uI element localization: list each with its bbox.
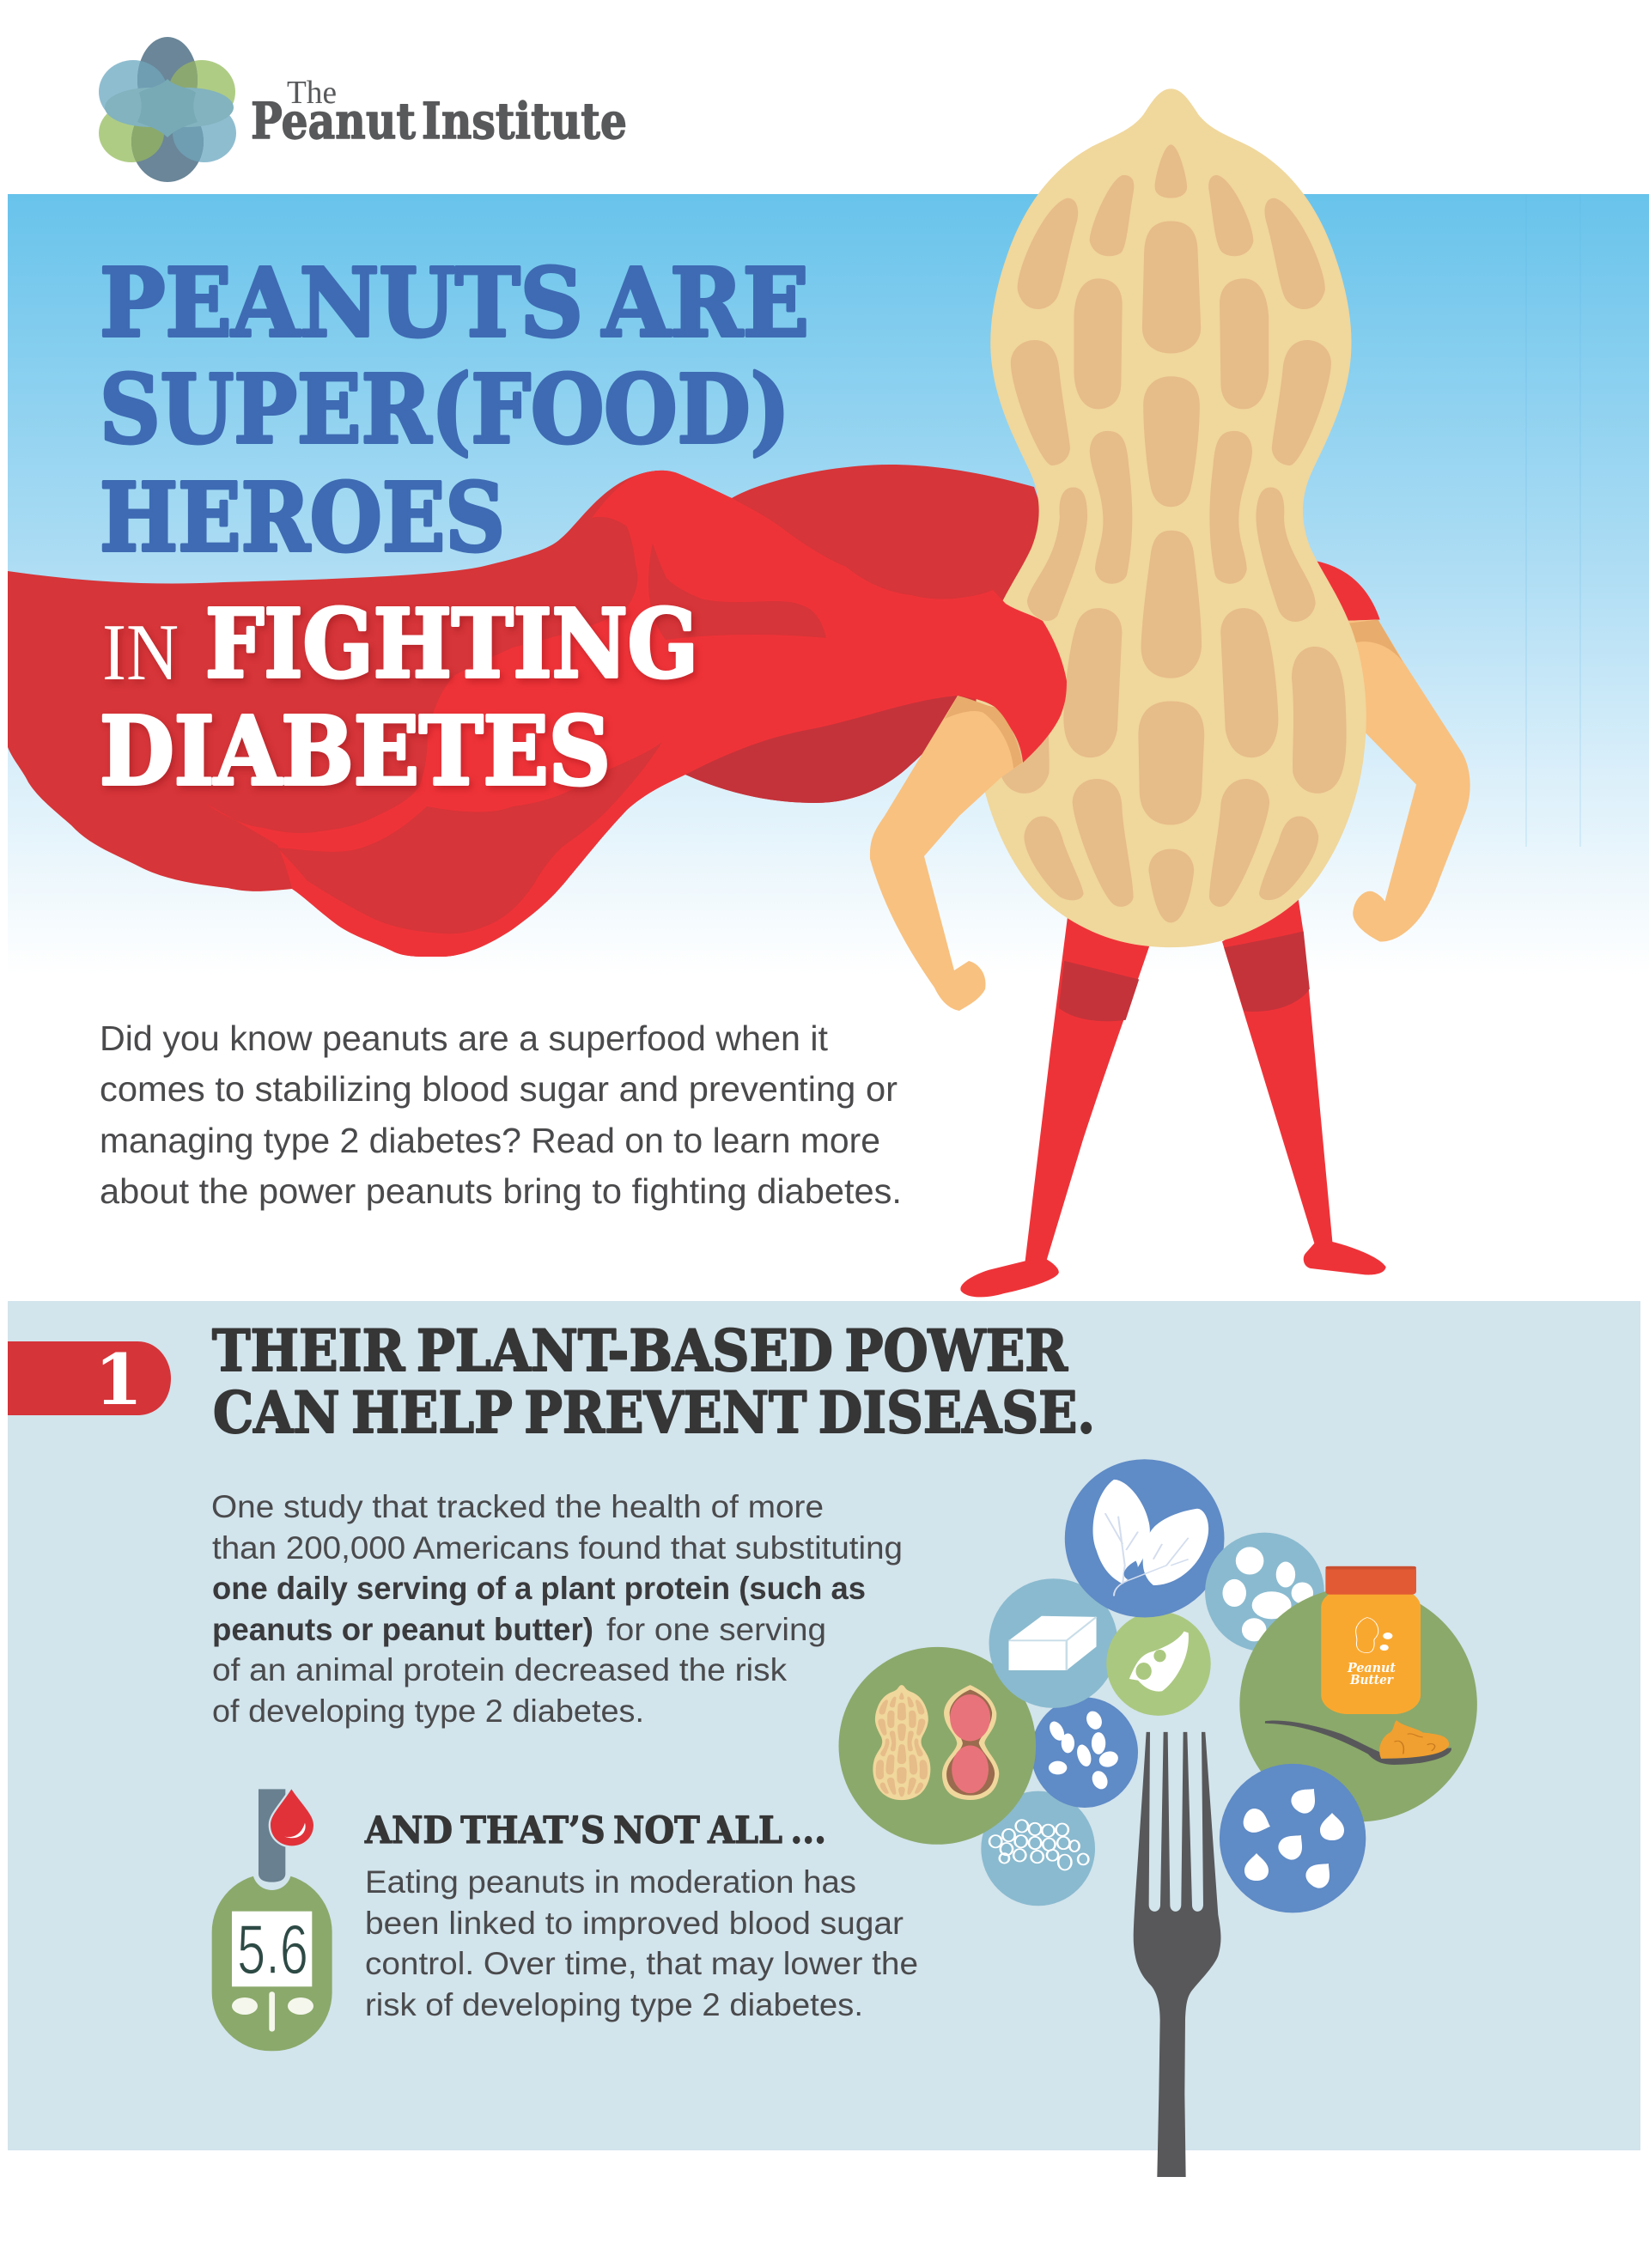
study paragraph: of an animal protein decreased the risk <box>212 1652 788 1687</box>
study paragraph: One study that tracked the health of more <box>211 1489 824 1524</box>
subheading paragraph: risk of developing type 2 diabetes. <box>365 1987 863 2022</box>
right leg <box>1222 897 1386 1274</box>
subheading paragraph: control. Over time, that may lower the <box>365 1946 918 1981</box>
circle: leafy greens <box>1065 1459 1225 1618</box>
icon: open peanut <box>942 1685 999 1800</box>
section heading: THEIR PLANT-BASED POWER <box>212 1317 1068 1384</box>
subheading paragraph: been linked to improved blood sugar <box>365 1906 904 1941</box>
cape: upper dark fold <box>648 544 826 640</box>
logo wordmark: Peanut Institute <box>251 92 627 150</box>
right arm shadow band <box>1345 619 1403 662</box>
logo: The Peanut Institute <box>99 37 627 182</box>
jar label <box>1347 1660 1396 1687</box>
plant protein food circles <box>839 1459 1477 1912</box>
icon: glucose meter: 5.6 <box>237 1911 308 1989</box>
peanut shell <box>976 88 1366 947</box>
word: FIGHTING: FIGHTING <box>205 588 698 699</box>
circle: tofu <box>989 1578 1118 1708</box>
logo wordmark <box>251 75 627 150</box>
icon: peanut butter dollop <box>1379 1720 1449 1759</box>
section number tab: 1 <box>94 1340 143 1421</box>
left leg <box>960 915 1150 1297</box>
icon: spoon <box>1265 1720 1451 1765</box>
subheading paragraph <box>365 1864 918 2022</box>
left arm <box>870 696 1023 1011</box>
section number tab <box>8 1340 171 1421</box>
word: DIABETES: DIABETES <box>100 696 611 806</box>
circle: almonds <box>1031 1697 1138 1808</box>
pumpkin seeds <box>1240 1781 1344 1892</box>
fork <box>1134 1732 1220 2177</box>
title line 1: PEANUTS ARE <box>100 247 809 358</box>
title line 2: SUPER(FOOD) <box>100 354 790 465</box>
logo wordmark: The <box>287 75 337 111</box>
jar label: Peanut <box>1347 1660 1396 1675</box>
small whole peanut <box>873 1685 930 1800</box>
legs <box>960 897 1386 1297</box>
cape: inner dark lobe <box>277 742 662 933</box>
study paragraph: for one serving <box>606 1612 826 1647</box>
cape: back fold <box>8 465 1074 957</box>
circle: peanut butter backdrop <box>1239 1587 1477 1821</box>
cape: lower shadow fold <box>685 696 958 803</box>
left arm skin <box>870 696 1023 1011</box>
left arm shadow band <box>945 696 1022 769</box>
cape title text <box>100 588 698 806</box>
section heading <box>212 1317 1095 1446</box>
icon: glucose meter <box>212 1789 332 2051</box>
icon: peanut butter jar <box>1321 1566 1421 1714</box>
subheading: AND THAT’S NOT ALL ... <box>364 1809 826 1852</box>
circle: pumpkin seeds backdrop <box>1220 1764 1366 1912</box>
intro paragraph: Did you know peanuts are a superfood when it <box>100 1018 829 1058</box>
study paragraph: than 200,000 Americans found that substituting <box>212 1530 903 1566</box>
right sleeve <box>1305 559 1380 621</box>
intro paragraph: comes to stabilizing blood sugar and preventing or <box>100 1069 898 1109</box>
subheading paragraph: Eating peanuts in moderation has <box>365 1864 856 1900</box>
study paragraph: one daily serving of a plant protein (such as <box>212 1571 866 1606</box>
title line 3: HEROES <box>100 462 505 573</box>
intro paragraph <box>100 1018 902 1211</box>
right leg band <box>1224 931 1310 1012</box>
study paragraph: peanuts or peanut butter) <box>212 1612 593 1647</box>
right arm <box>1305 559 1470 942</box>
circle: seeds <box>981 1791 1095 1906</box>
circle: edamame <box>1106 1611 1211 1716</box>
intro paragraph: about the power peanuts bring to fighting diabetes. <box>100 1171 902 1211</box>
hero sky background <box>8 194 1649 984</box>
main title <box>100 247 809 573</box>
peanut hero body <box>976 88 1366 947</box>
section heading: CAN HELP PREVENT DISEASE. <box>213 1379 1095 1446</box>
logo mark: overlapping petals <box>99 37 236 182</box>
intro paragraph: managing type 2 diabetes? Read on to learn more <box>100 1121 880 1160</box>
peanut shell texture <box>995 144 1347 922</box>
circle: peanuts backdrop <box>839 1647 1036 1845</box>
study paragraph: of developing type 2 diabetes. <box>212 1693 644 1729</box>
left leg band <box>1059 961 1139 1021</box>
study paragraph <box>211 1489 903 1729</box>
panel: section 1 background <box>8 1301 1640 2150</box>
circle: beans <box>1205 1533 1324 1651</box>
and that's not all block <box>364 1809 918 2022</box>
cape: bright front fold and sleeve <box>206 471 1067 957</box>
word: IN: IN <box>102 608 179 697</box>
jar label: Butter <box>1349 1672 1394 1687</box>
right arm skin <box>1345 619 1470 942</box>
